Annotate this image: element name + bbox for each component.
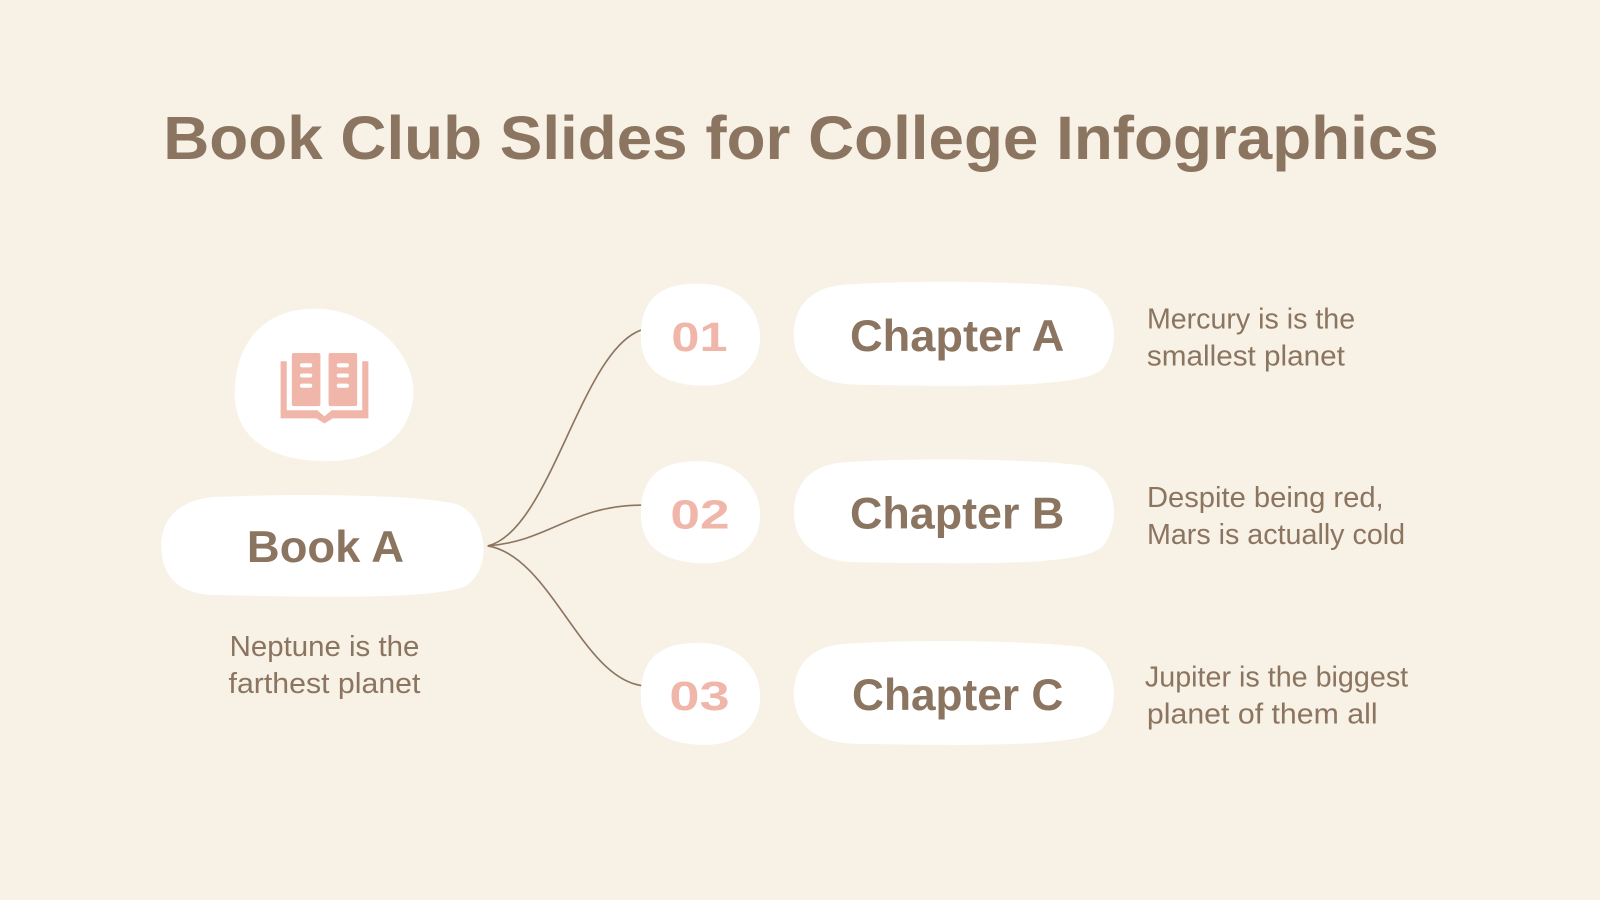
row 3: chapter C: 03 xyxy=(669,673,730,719)
row 1: chapter A: Chapter A xyxy=(850,310,1064,361)
row 2: chapter B: 02 xyxy=(670,492,730,538)
row 1: chapter A: 01 xyxy=(671,314,728,360)
book description: farthest planet xyxy=(229,668,420,700)
icon: open book xyxy=(281,353,368,423)
connector lines xyxy=(488,330,643,686)
book description xyxy=(229,631,420,700)
row 3: chapter C: planet of them all xyxy=(1147,698,1378,730)
row 3: chapter C: Chapter C xyxy=(852,669,1063,720)
book description: Neptune is the xyxy=(230,631,419,663)
row 2: chapter B: Mars is actually cold xyxy=(1147,519,1405,551)
icon blob: book xyxy=(235,309,413,461)
title: Book Club Slides for College Infographics xyxy=(163,104,1439,172)
row 3: chapter C xyxy=(641,641,1408,745)
row 1: chapter A xyxy=(641,282,1355,386)
row 2: chapter B: Despite being red, xyxy=(1147,482,1384,514)
book pill xyxy=(161,495,484,597)
row 2: chapter B xyxy=(641,459,1405,563)
row 1: chapter A: Mercury is is the xyxy=(1147,304,1355,336)
row 2: chapter B: Chapter B xyxy=(850,488,1064,539)
row 1: chapter A: smallest planet xyxy=(1147,340,1345,372)
book pill: Book A xyxy=(247,521,404,572)
row 3: chapter C: Jupiter is the biggest xyxy=(1145,662,1408,694)
